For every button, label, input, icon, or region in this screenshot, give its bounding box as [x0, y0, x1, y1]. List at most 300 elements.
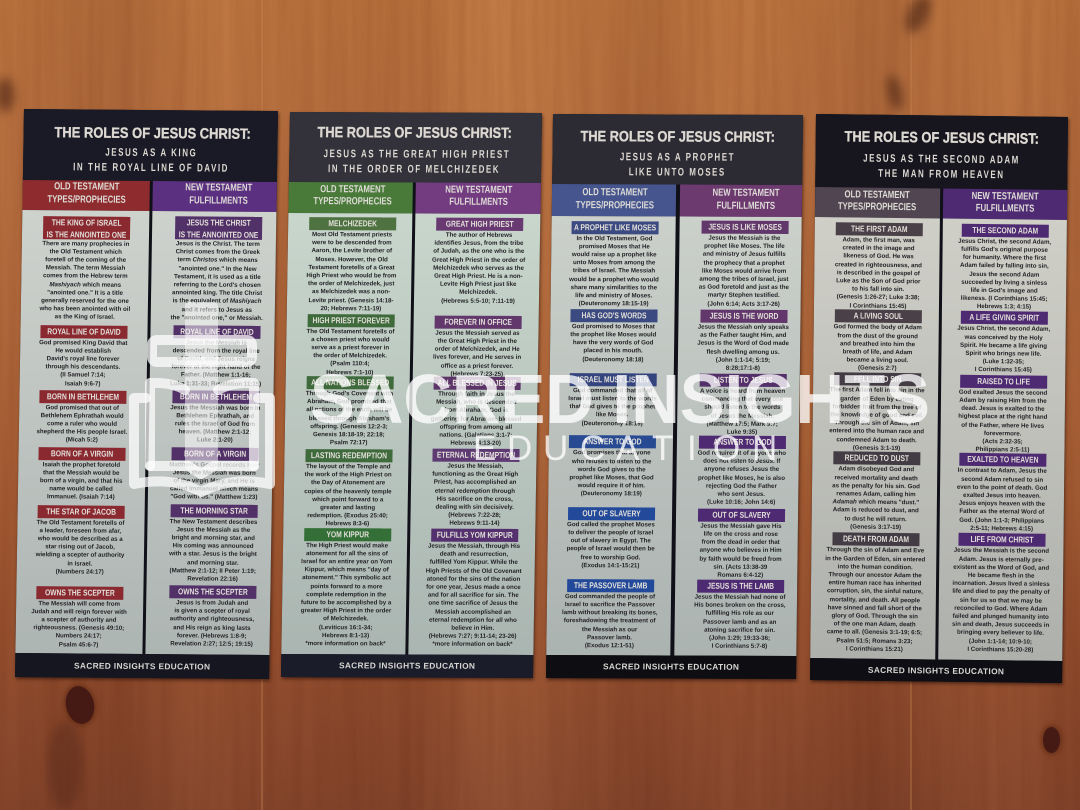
block: king of israel: who has been anointed with oil	[39, 305, 130, 313]
block: raised to life: God exalted Jesus the second	[959, 388, 1047, 396]
block: answer to god: who refuses to listen to the	[572, 458, 651, 465]
block: great high priest: The author of Hebrews	[446, 232, 512, 239]
block: a living soul: breath of life, and Adam	[843, 348, 912, 356]
block: virgin fulfilled: Jesus the Messiah was born	[173, 469, 256, 477]
block: born in bethlehem fulfilled	[170, 390, 260, 444]
block: answer to god fulfilled: prophet like Moses, he is also	[698, 474, 785, 482]
block: king of israel: comes from the Hebrew term	[43, 272, 128, 280]
block: has gods words	[570, 309, 658, 363]
block: reduced to dust	[811, 451, 941, 532]
column heading: old testament	[288, 182, 413, 213]
block: a life giving spirit: Spirit who brings new life.	[965, 350, 1042, 358]
dark wood patch near second gap	[884, 74, 906, 112]
block: high priest forever: serve as a priest forever in	[311, 344, 389, 351]
block: answer to god: God promises that anyone	[573, 449, 651, 457]
block: jesus is the word: flesh dwelling among us.	[707, 348, 780, 356]
block: morning star: and morning star.	[187, 559, 239, 566]
block: virgin fulfilled: "God with us." (Matthew 1:23)	[170, 494, 257, 501]
block: fulfills yom kippur: and for all sacrifice for sin. The	[428, 592, 519, 599]
block: life from christ: LIFE FROM CHRIST	[970, 534, 1033, 545]
block: star of jacob: THE STAR OF JACOB	[46, 506, 116, 516]
block: jesus the christ: Jesus is the Christ. The term	[176, 240, 260, 248]
subtitle: JESUS AS THE GREAT HIGH PRIEST	[324, 148, 510, 161]
block: life from christ: I Corinthians 15:20-28)	[967, 646, 1033, 654]
block: morning star	[169, 504, 258, 583]
subtitle	[324, 148, 510, 175]
block: reduced to dust: renames Adam, calling him	[836, 490, 916, 498]
dark wood patch top right	[900, 0, 936, 36]
block: eternal redemption: Hebrews 9:11-14)	[449, 520, 500, 527]
block: the second adam: for humanity. Where the first	[963, 254, 1046, 262]
subtitle: IN THE ROYAL LINE OF DAVID	[73, 161, 229, 175]
block: high priest forever: Hebrews 7:1-10)	[326, 369, 373, 376]
block: virgin fulfilled: BORN OF A VIRGIN	[183, 448, 246, 458]
block: answer to god	[568, 435, 656, 498]
block: out of slavery fulfilled: Romans 6:4-12)	[717, 572, 763, 579]
block: fulfills yom kippur: death and resurrection,	[440, 551, 508, 558]
block: israel must listen: like Moses.	[596, 411, 629, 419]
block: melchizedek: Aaron, the Levite brother of	[311, 248, 392, 255]
block: raised to life: (Acts 2:32-35;	[982, 438, 1023, 445]
block: high priest forever: HIGH PRIEST FOREVER	[312, 315, 389, 325]
block: passover lamb	[562, 579, 658, 649]
column heading: old testament: OLD TESTAMENT	[320, 184, 385, 195]
column heading: new testament: FULFILLMENTS	[717, 200, 775, 211]
block: has gods words: the prophet like Moses would	[570, 331, 656, 338]
block: yom kippur: complete redemption in the	[306, 591, 386, 598]
block: answer to god fulfilled: (Luke 10:16; John 14:6)	[707, 499, 775, 506]
block: king of israel: THE KING OF ISRAEL	[51, 217, 121, 227]
block: a life giving spirit: (Luke 1:32-35;	[983, 358, 1024, 366]
block: a life giving spirit: was conceived by the Holy	[965, 333, 1043, 341]
block: great high priest: of Judah, as the one who is the	[433, 248, 524, 255]
block: a living soul: A LIVING SOUL	[853, 311, 903, 321]
block: all nations blessed: ALL NATIONS BLESSED	[311, 377, 389, 387]
block: a living soul: (Genesis 2:7)	[858, 365, 897, 372]
block: jesus is the word: JESUS IS THE WORD	[709, 311, 778, 321]
header: prophet	[552, 114, 803, 185]
block: a prophet like moses: promised Moses that He	[579, 243, 650, 250]
block: exalted to heaven: EXALTED TO HEAVEN	[967, 454, 1038, 465]
block: fulfills yom kippur: for one year, Jesus made a once	[426, 584, 521, 591]
block: answer to god fulfilled: who sent Jesus.	[718, 491, 765, 498]
column heading: new testament: NEW TESTAMENT	[445, 184, 512, 195]
block: owns the scepter: a scepter of authority and	[41, 616, 117, 624]
block: answer to god: (Deuteronomy 18:19)	[581, 491, 642, 498]
block: fulfills yom kippur: fulfilled Yom Kippur. While the	[430, 559, 518, 566]
block: yom kippur: future to be accomplished by a	[301, 599, 391, 606]
block: death from adam: I Corinthians 15:21)	[846, 645, 903, 653]
block: all nations blessed: Psalm 72:17)	[330, 439, 368, 447]
block: royal line fulfilled: ROYAL LINE OF DAVID	[180, 326, 253, 336]
block: yom kippur: points forward to a more	[310, 583, 382, 590]
block: royal line of david: through his descendants.	[45, 363, 120, 371]
block: forever in office: the Great High Priest in the	[438, 337, 517, 345]
block: death from adam: glory of God. Through the sin	[831, 612, 918, 620]
block: royal line fulfilled: forever at the right hand of the	[171, 363, 261, 371]
block: lasting redemption: Hebrews 8:3-6)	[326, 521, 369, 528]
block: life from christ: sin and death, Jesus succeeds in	[952, 621, 1049, 629]
block: a life giving spirit	[938, 311, 1069, 376]
subtitle: THE MAN FROM HEAVEN	[878, 168, 1005, 181]
block: fell into sin	[811, 372, 942, 453]
block: jesus is the lamb	[694, 580, 786, 650]
block: out of slavery fulfilled: anyone who believes in Him	[700, 547, 782, 554]
block: the first adam: Adam, the first man, was	[842, 236, 915, 244]
title: THE ROLES OF JESUS CHRIST:	[317, 125, 512, 141]
block: born in bethlehem: Bethlehem Ephrathah would	[41, 412, 124, 420]
block: the second adam: Jesus the second Adam	[969, 270, 1039, 278]
block: king of israel: the Old Testament which	[50, 248, 122, 256]
block: jesus the christ: Christ comes from the Greek	[176, 248, 260, 256]
block: melchizedek: as Melchizedek was a non-	[312, 289, 390, 296]
block: scepter fulfilled: authority and righteousness,	[170, 616, 254, 623]
block: king of israel	[39, 216, 130, 321]
block: forever in office: FOREVER IN OFFICE	[444, 316, 512, 327]
block: jesus is like moses: among the tribes of Israel, just	[699, 276, 789, 283]
block: fell into sin: garden of Eden by eating	[840, 395, 914, 403]
block: born in bethlehem fulfilled: heaven. (Matthew 2:1-12;	[179, 428, 251, 436]
block: a life giving spirit: A LIFE GIVING SPIRIT	[969, 312, 1039, 323]
block: star of jacob: (Numbers 24:17)	[56, 568, 104, 575]
block: listen to jesus: Luke 9:35)	[727, 429, 757, 436]
block: jesus is like moses: and ministry of Jesus fulfills	[703, 251, 786, 258]
block: king of israel: Mashiyach which means	[49, 281, 121, 288]
block: melchizedek: MELCHIZEDEK	[328, 218, 377, 228]
block: lasting redemption: greater and lasting	[320, 504, 375, 511]
block: high priest forever	[306, 314, 395, 376]
block: yom kippur: YOM KIPPUR	[326, 529, 369, 539]
block: owns the scepter: Judah and will reign forever with	[31, 608, 127, 616]
block: all blessed in jesus	[431, 376, 521, 447]
wood knot right	[1043, 727, 1060, 753]
column heading: old testament: TYPES/PROPHECIES	[838, 201, 916, 213]
column heading: new testament: NEW TESTAMENT	[972, 191, 1039, 203]
block: the second adam: THE SECOND ADAM	[972, 225, 1038, 235]
block: high priest forever: the order of Melchizedek.	[313, 352, 387, 360]
column heading: new testament: NEW TESTAMENT	[712, 188, 780, 199]
block: melchizedek: High Priest who would be from	[306, 272, 396, 279]
block: star of jacob: in Israel.	[67, 560, 92, 567]
block: born of a virgin: Immanuel. (Isaiah 7:14)	[47, 494, 115, 501]
block: fell into sin: entered into the human race and	[829, 428, 924, 436]
column heading: new testament: FULFILLMENTS	[449, 196, 508, 207]
block: eternal redemption: Priest, has accomplished an	[434, 479, 516, 486]
column heading: new testament	[415, 183, 541, 214]
watermark subtitle: EDUCATION	[473, 429, 777, 468]
block: eternal redemption: Jesus the Messiah,	[447, 463, 503, 470]
block: reduced to dust: Adamah which means "dust."	[832, 498, 919, 506]
block: king of israel: generally reserved for the one	[41, 297, 129, 305]
block: lasting redemption	[304, 449, 393, 528]
block: melchizedek: Most Old Testament priests	[312, 231, 392, 238]
block: jesus is like moses: JESUS IS LIKE MOSES	[708, 222, 781, 232]
block: the first adam	[835, 222, 923, 310]
block: answer to god fulfilled: anyone refuses Jesus the	[704, 466, 779, 473]
block: israel must listen	[568, 373, 657, 427]
block: life from christ: Adam. Jesus is eternally pre-	[959, 555, 1044, 563]
block: high priest forever: a chosen priest who would	[311, 336, 390, 343]
block: royal line fulfilled: Father. (Matthew 1:1-16;	[181, 372, 251, 379]
old testament column body	[281, 213, 412, 654]
block: life from christ: bringing every believer to life.	[957, 629, 1044, 637]
block: lasting redemption: which point forward to a	[312, 496, 383, 503]
block: reduced to dust: received mortality and death	[834, 474, 918, 482]
old testament column body	[810, 217, 940, 660]
block: fell into sin: the knowledge of good and evil.	[830, 411, 923, 419]
panel: prophet bookmark	[546, 114, 803, 679]
block: the second adam: life in God's image and	[971, 287, 1038, 295]
block: jesus the christ: JESUS THE CHRIST	[186, 217, 250, 228]
block: out of slavery fulfilled: sin. (Acts 13:38-39	[713, 563, 767, 571]
block: all nations blessed: all nations of the earth will be	[306, 406, 392, 414]
block: answer to god: ANSWER TO GOD	[583, 437, 641, 447]
block: exalted to heaven: Jesus enjoys heaven with the	[959, 500, 1045, 508]
block: all blessed in jesus: Through faith in Jesus the	[438, 391, 515, 398]
block: out of slavery fulfilled: Jesus the Messiah gave His	[700, 522, 782, 530]
block: a prophet like moses: would be a prophet who would	[569, 276, 659, 283]
block: israel must listen: God commanded that all of	[573, 387, 652, 394]
block: royal line of david: David's royal line forever	[47, 355, 120, 363]
block: passover lamb: Passover lamb.	[587, 634, 632, 641]
block: star of jacob: a leader, foreseen from afar,	[39, 527, 121, 535]
block: royal line of david: ROYAL LINE OF DAVID	[47, 326, 120, 336]
block: scepter fulfilled	[169, 585, 256, 648]
block: forever in office: office as a priest forever.	[441, 362, 513, 369]
new testament column body	[938, 219, 1067, 661]
block: born in bethlehem: God promised that out of	[46, 404, 119, 411]
block: the first adam: to his fall into sin.	[852, 286, 904, 293]
block: yom kippur: (Leviticus 16:1-34;	[319, 624, 373, 631]
block: all nations blessed: blessed through Abraham's	[309, 415, 390, 422]
block: morning star: Revelation 22:16)	[187, 575, 238, 583]
block: all blessed in jesus: offspring from among all	[440, 423, 512, 431]
column heading: old testament	[22, 180, 150, 211]
block: a life giving spirit: Jesus Christ, the second Adam,	[957, 325, 1050, 333]
block: jesus is like moses: Jesus the Messiah is the	[708, 235, 781, 242]
block: jesus is the word: Jesus the Messiah only speaks	[698, 324, 789, 331]
block: all nations blessed: offspring. (Genesis 12:2-3;	[310, 423, 388, 430]
block: yom kippur: The High Priest would make	[306, 542, 388, 549]
block: born of a virgin	[38, 447, 126, 501]
block: fell into sin: Through the sin of Adam, sin	[834, 419, 919, 427]
block: forever in office: order of Melchizedek, and He	[435, 346, 520, 353]
footer	[281, 654, 533, 678]
block: jesus the christ: is the equivalent of Mashiyach	[173, 298, 261, 305]
block: life from christ: (John 1:1-14; 10:9-10;	[969, 638, 1032, 645]
block: life from christ: reconciled to God. Where Adam	[954, 605, 1047, 613]
block: eternal redemption: dealing with sin decisively.	[435, 504, 514, 511]
new testament column body	[674, 217, 802, 656]
block: born in bethlehem: shepherd the His people Israel.	[36, 428, 127, 436]
column heading: new testament: FULFILLMENTS	[189, 195, 248, 207]
block: passover lamb: God commanded the people of	[565, 593, 655, 600]
footer: SACRED INSIGHTS EDUCATION	[339, 660, 475, 671]
footer: SACRED INSIGHTS EDUCATION	[74, 660, 210, 672]
block: king of israel: foretell of the coming of the	[45, 256, 126, 264]
block: has gods words: (Deuteronomy 18:18)	[582, 356, 644, 363]
block: lasting redemption: redemption. (Exodus 25:40;	[307, 512, 388, 520]
block: death from adam: have sinned and fall short of the	[828, 604, 922, 612]
block: born in bethlehem fulfilled: rules the Israel of God from	[175, 420, 255, 428]
block: out of slavery fulfilled: life on the cross and rose	[704, 531, 778, 538]
block: jesus is the lamb: Passover lamb and as an	[703, 618, 776, 626]
block: passover lamb: Israel to sacrifice the Passover	[565, 601, 655, 608]
block: royal line fulfilled: of David, and Jesus reigns	[177, 355, 255, 363]
block: great high priest	[432, 218, 526, 305]
block: exalted to heaven: second Adam refused to sin	[961, 475, 1043, 483]
block: israel must listen: Israel must listen to the words	[568, 395, 657, 402]
block: a life giving spirit: I Corinthians 15:45)	[975, 366, 1032, 374]
block: listen to jesus: of Jesus the Messiah.	[710, 412, 774, 420]
block: raised to life: dead. Jesus is exalted to the	[961, 405, 1045, 413]
block: virgin fulfilled: Matthew's Gospel records how	[169, 461, 260, 468]
block: jesus is the lamb: (John 1:29; 19:33-36;	[709, 635, 770, 642]
block: a prophet like moses	[569, 221, 659, 308]
block: jesus is the lamb: Jesus the Messiah had none of	[695, 594, 785, 601]
block: has gods words: God promised to Moses that	[572, 323, 655, 330]
block: star of jacob: The Old Testament foretells of	[36, 519, 124, 526]
block: royal line of david: He would establish	[55, 347, 111, 354]
block: listen to jesus: A voice is heard from heaven	[700, 388, 785, 395]
block: great high priest: GREAT HIGH PRIEST	[445, 219, 513, 229]
block: jesus the christ: annointed king. The title Christ	[172, 289, 262, 297]
block: virgin fulfilled	[169, 447, 260, 501]
block: out of slavery fulfilled: from the dead in order that	[702, 539, 780, 546]
dark plank below left knot	[48, 720, 82, 810]
block: answer to god fulfilled: God requires it of anyone who	[698, 450, 786, 457]
block: listen to jesus: LISTEN TO JESUS	[713, 375, 772, 385]
panel: high priest bookmark	[281, 112, 542, 678]
block: out of slavery: free to worship God.	[581, 554, 640, 561]
block: royal line of david: (II Samuel 7:14;	[60, 372, 105, 379]
block: life from christ: failed and plunged humanity into	[953, 613, 1049, 621]
header: second adam	[815, 114, 1068, 190]
block: virgin fulfilled: called Immanuel which means	[170, 485, 258, 493]
block: answer to god: prophet like Moses, that God	[569, 474, 654, 481]
block: owns the scepter: Numbers 24:17;	[56, 633, 102, 640]
block: the second adam	[939, 223, 1070, 313]
block: answer to god fulfilled: rejecting God the Father	[706, 482, 777, 490]
block: life from christ: sin for us so that we may be	[960, 596, 1042, 604]
block: jesus is like moses: as God foretold and just as the	[699, 284, 789, 291]
block: jesus the christ	[170, 216, 263, 322]
block: yom kippur: Hebrews 8:1-13)	[322, 632, 369, 639]
block: great high priest: identifies Jesus, from the tribe	[434, 240, 523, 247]
block: the first adam: I Corinthians 15:45)	[849, 302, 906, 310]
block: answer to god: words God gives to the	[578, 466, 646, 473]
column heading: old testament: TYPES/PROPHECIES	[47, 194, 126, 206]
block: born in bethlehem fulfilled: Bethlehem Ephrathah, and	[176, 412, 254, 420]
block: the second adam: Hebrews 1:3; 4:15)	[977, 303, 1031, 311]
block: life from christ	[935, 533, 1067, 655]
block: out of slavery: OUT OF SLAVERY	[582, 508, 640, 518]
block: king of israel: There are many prophecies in	[42, 240, 129, 247]
block: born in bethlehem	[36, 390, 127, 444]
block: great high priest: (Hebrews 5:5-10; 7:11-19)	[441, 297, 515, 305]
block: the first adam: created in the image and	[843, 245, 915, 252]
block: jesus is the lamb: His bones broken on the cross,	[694, 602, 786, 609]
block: scepter fulfilled: forever. (Hebrews 1:8-9;	[177, 632, 247, 640]
block: jesus the christ: term Christos which means	[177, 257, 258, 264]
dark wood patch left edge	[0, 78, 14, 112]
block: melchizedek: 20; Hebrews 7:11-19)	[320, 305, 381, 312]
block: a prophet like moses: (Deuteronomy 18:15-19)	[579, 300, 649, 308]
watermark name: SACRED INSIGHTS	[310, 360, 930, 438]
block: owns the scepter: Psalm 45:6-7)	[59, 641, 98, 648]
block: life from christ: existent as the Word of God, and	[953, 564, 1049, 572]
block: the second adam: likeness. (I Corinthians 15:45;	[961, 295, 1047, 303]
block: great high priest: Melchizedek who serves as the	[433, 264, 524, 272]
block: out of slavery: people of Israel would then be	[567, 545, 655, 553]
block: death from adam: into the human condition.	[838, 563, 913, 571]
block: star of jacob: star rising out of Jacob,	[45, 543, 115, 551]
block: star of jacob: wielding a scepter of authority	[36, 551, 124, 559]
block: king of israel: IS THE ANNOINTED ONE	[46, 229, 126, 239]
column heading: old testament: OLD TESTAMENT	[54, 181, 119, 193]
title: THE ROLES OF JESUS CHRIST:	[844, 129, 1039, 148]
block: reduced to dust: to dust he will return.	[845, 515, 907, 523]
block: melchizedek: Levite priest. (Genesis 14:18-	[308, 297, 394, 304]
block: forever in office: (Hebrews 7:23-25)	[450, 370, 503, 378]
block: morning star: Jesus the Messiah as the	[176, 526, 250, 534]
block: born of a virgin: Isaiah the prophet foretold	[43, 461, 120, 468]
block: all blessed in jesus: gathering for Abraham blessed	[431, 415, 521, 423]
block: fell into sin: FELL INTO SIN	[853, 374, 901, 384]
block: listen to jesus: commanding that every one	[702, 396, 783, 403]
block: a living soul: and breathed into him the	[840, 340, 915, 348]
block: passover lamb: THE PASSOVER LAMB	[573, 580, 647, 590]
block: life from christ: Jesus the Messiah is the second	[954, 547, 1049, 555]
block: eternal redemption: His sacrifice on the cross,	[437, 495, 513, 503]
block: fulfills yom kippur: *more information on back*	[432, 641, 513, 648]
subtitle: JESUS AS A KING	[105, 147, 197, 159]
block: a prophet like moses: A PROPHET LIKE MOSES	[573, 222, 656, 232]
block: death from adam: Through our ancestor Adam the	[828, 571, 922, 579]
block: the second adam: Adam failed by falling into sin,	[960, 262, 1049, 270]
block: death from adam: DEATH FROM ADAM	[842, 534, 909, 544]
block: morning star: His coming was announced	[173, 542, 254, 550]
block: life from christ: He became flesh in the	[968, 572, 1034, 580]
panel: second adam bookmark	[810, 114, 1068, 683]
block: all blessed in jesus: from Abraham, God is	[444, 407, 508, 414]
block: high priest forever: The Old Testament foretells of	[306, 328, 395, 335]
block: king of israel: Messiah. The term Messiah	[46, 264, 125, 272]
block: yom kippur	[301, 528, 392, 647]
block: israel must listen: (Deuteronomy 18:19)	[582, 420, 643, 427]
block: royal line fulfilled: descended from the royal line	[173, 347, 260, 355]
block: morning star: bright and morning star, and	[172, 534, 255, 542]
block: out of slavery fulfilled	[698, 508, 786, 579]
block: death from adam	[809, 532, 941, 654]
column heading: old testament: OLD TESTAMENT	[844, 189, 910, 201]
column heading: old testament: OLD TESTAMENT	[582, 187, 647, 198]
block: israel must listen: ISRAEL MUST LISTEN	[577, 374, 648, 384]
block: fell into sin: forbidden fruit from the tree of	[833, 403, 921, 411]
block: lasting redemption: the work of the High Priest on	[305, 471, 392, 479]
block: has gods words: have the very words of God	[573, 339, 653, 347]
title: THE ROLES OF JESUS CHRIST:	[580, 129, 775, 145]
block: king of israel: as the King of Israel.	[55, 314, 115, 321]
block: death from adam: Psalm 51:5; Romans 3:23;	[836, 637, 913, 645]
block: a prophet like moses: In the Old Testament, God	[576, 235, 652, 242]
block: melchizedek: the order of Melchizedek, just	[308, 280, 394, 288]
block: the first adam: likeness of God. He was	[843, 253, 914, 261]
block: fulfills yom kippur: Jesus the Messiah, through His	[428, 543, 520, 550]
block: a prophet like moses: would raise up a prophet like	[572, 251, 657, 258]
block: royal line of david: God promised King David that	[39, 339, 128, 346]
block: reduced to dust: Adam disobeyed God and	[838, 466, 914, 474]
